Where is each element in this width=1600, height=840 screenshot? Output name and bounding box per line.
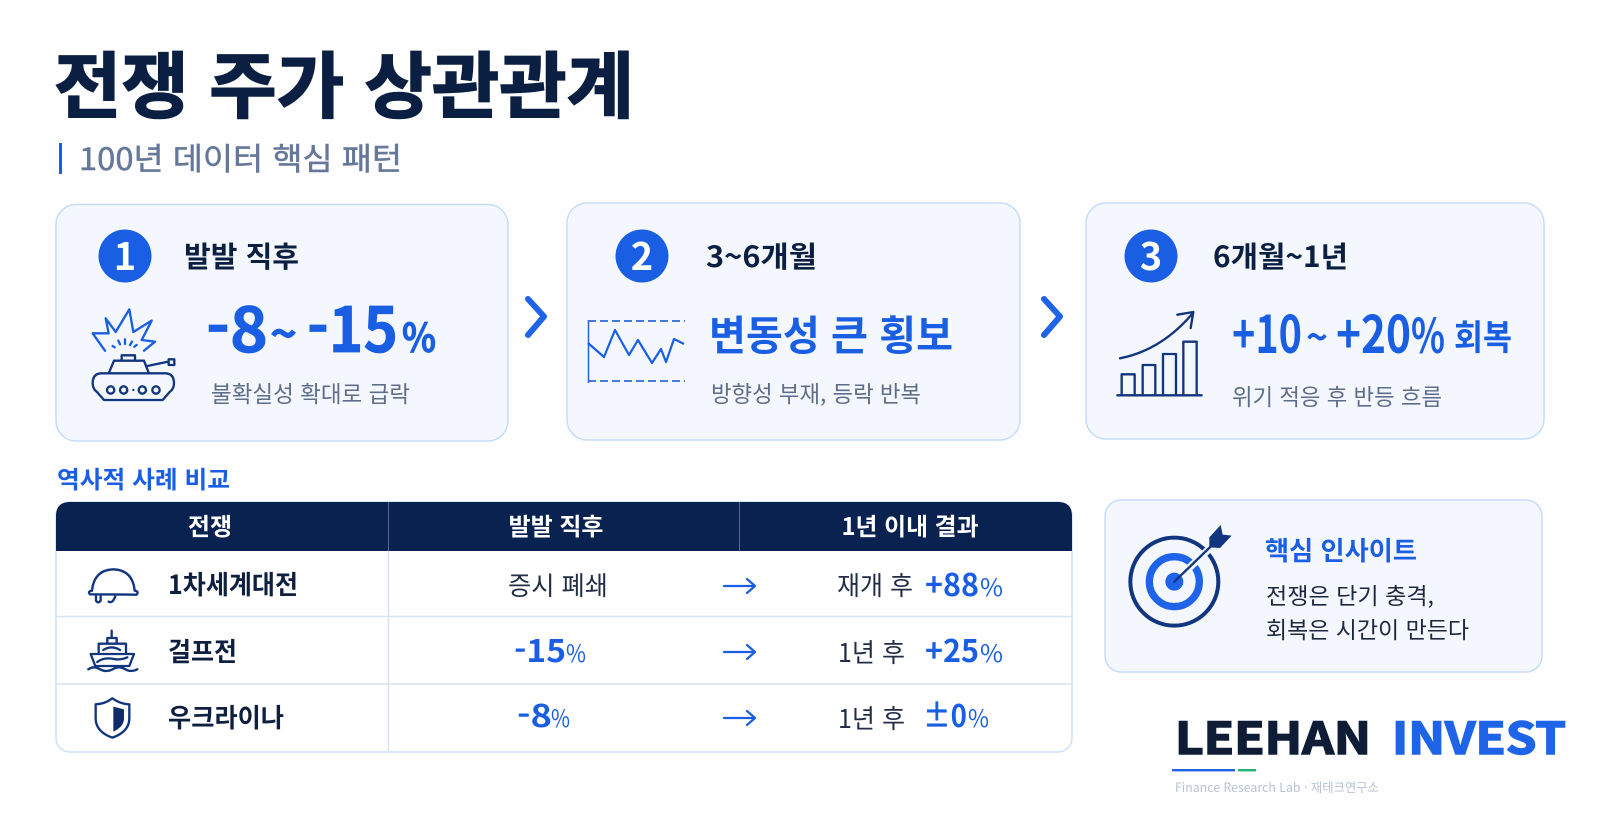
onset value: 증시 폐쇄 (508, 566, 608, 603)
logo: LEEHAN INVEST: Finance Research Lab · 재테크연구소 (1175, 777, 1379, 796)
name: 1차세계대전 (168, 565, 298, 602)
panel: step 1 (56, 204, 508, 441)
step 3 figure: 회복 (1454, 310, 1512, 361)
result: % (968, 699, 989, 734)
step 3 figure (1232, 293, 1512, 368)
step 2 badge: 2 (631, 226, 653, 281)
arrow: step 1 to 2 (528, 299, 544, 335)
onset value: -8 (517, 691, 552, 736)
arrow (724, 645, 755, 659)
step 2 description: 방향성 부재, 등락 반복 (711, 375, 921, 409)
onset value: % (566, 634, 586, 669)
step 3 figure: +10 (1232, 293, 1302, 368)
result (838, 626, 1003, 671)
table header: 발발 직후 (508, 507, 604, 542)
icon: helmet (89, 569, 138, 602)
step 3 badge (1124, 226, 1178, 282)
icon: rising bar chart (1117, 312, 1202, 395)
step 1 figure (206, 280, 436, 370)
icon: shield (96, 698, 129, 738)
step 3 description: 위기 적응 후 반등 흐름 (1232, 378, 1442, 412)
insight heading: 핵심 인사이트 (1265, 531, 1417, 568)
table: historical comparison (56, 502, 1072, 752)
name: 걸프전 (168, 632, 237, 669)
step 3 figure: % (1411, 297, 1445, 367)
step 1 badge: 1 (114, 226, 136, 281)
insight text: 회복은 시간이 만든다 (1266, 611, 1469, 645)
panel: step 2 (567, 203, 1020, 440)
title: 전쟁 주가 상관관계 (54, 28, 634, 133)
step 1 badge (98, 226, 152, 282)
result: 1년 후 (838, 633, 905, 670)
insight text: 전쟁은 단기 충격, (1266, 577, 1434, 611)
result: % (980, 568, 1003, 603)
result (838, 691, 989, 736)
section heading: 역사적 사례 비교 (57, 460, 230, 495)
step 2 figure: 변동성 큰 횡보 (709, 302, 953, 362)
logo: LEEHAN INVEST: LEEHAN (1175, 703, 1371, 767)
step 3 badge: 3 (1140, 226, 1162, 281)
step 2 badge (616, 226, 668, 282)
onset value: % (551, 699, 570, 734)
arrow (724, 711, 755, 725)
step 1 figure: % (402, 306, 436, 364)
result: % (980, 634, 1003, 669)
icon: ship (88, 631, 137, 671)
onset value (517, 691, 570, 736)
icon: volatile sideways chart (588, 320, 685, 383)
table header: 전쟁 (188, 507, 232, 542)
icon: tank with explosion (93, 309, 174, 400)
step 3 figure: +20 (1336, 293, 1411, 368)
result: ±0 (923, 691, 967, 736)
icon: target with arrow (1130, 525, 1232, 626)
table header (56, 502, 1072, 551)
row: Ukraine (96, 691, 989, 738)
result: 1년 후 (838, 699, 905, 736)
result: 재개 후 (837, 566, 913, 603)
arrow (724, 579, 755, 593)
result (837, 560, 1003, 605)
row: Gulf War (88, 626, 1003, 671)
result: +25 (925, 626, 979, 671)
insight text (1266, 577, 1469, 645)
onset value: -15 (514, 626, 566, 671)
table header: 1년 이내 결과 (842, 507, 978, 542)
onset value (514, 626, 586, 671)
step 1 figure: ~ (270, 299, 297, 363)
logo: LEEHAN INVEST: INVEST (1392, 703, 1566, 767)
step 1 figure: -8 (206, 280, 268, 370)
name: 우크라이나 (168, 698, 284, 735)
panel: step 3 (1086, 203, 1544, 439)
step 1 figure: -15 (307, 280, 398, 370)
step 3 figure: ~ (1306, 307, 1328, 362)
row: World War I (89, 560, 1003, 605)
panel: key insight (1105, 500, 1542, 672)
step 2 label: 3~6개월 (706, 234, 817, 276)
step 1 description: 불확실성 확대로 급락 (211, 375, 410, 409)
result: +88 (925, 560, 979, 605)
subtitle: 100년 데이터 핵심 패턴 (79, 134, 402, 179)
logo: LEEHAN INVEST (1172, 703, 1566, 796)
step 1 label: 발발 직후 (184, 234, 299, 276)
arrow: step 2 to 3 (1044, 299, 1060, 335)
step 3 label: 6개월~1년 (1213, 234, 1348, 276)
